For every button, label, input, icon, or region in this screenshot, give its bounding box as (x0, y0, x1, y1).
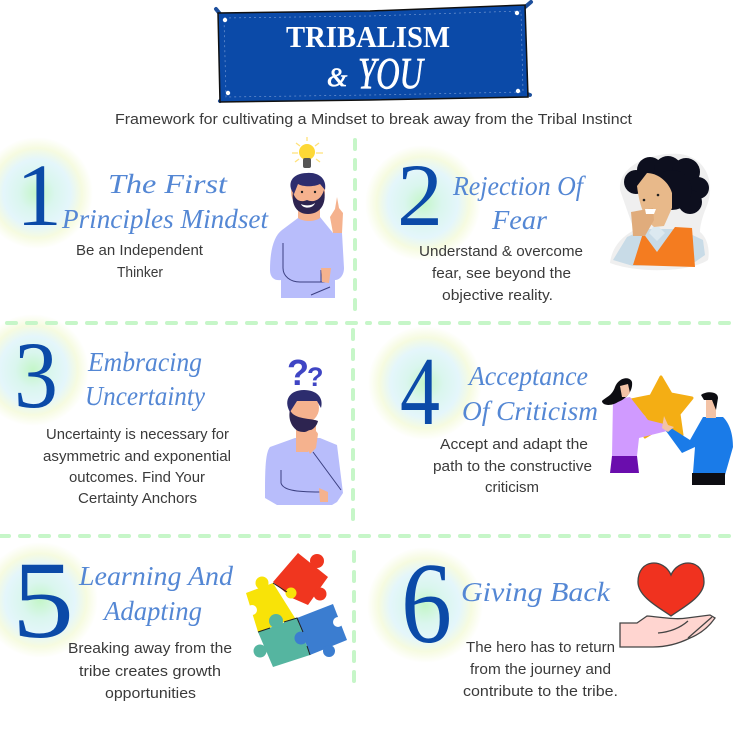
icon: light bulb (292, 137, 323, 168)
number 3: 3 (14, 322, 58, 428)
panel: 3 embracing uncertainty (0, 314, 343, 507)
panel: 2 rejection of fear (365, 145, 710, 304)
number 6: 6 (401, 540, 452, 667)
heading: Giving Back (461, 577, 611, 607)
body text: opportunities (105, 685, 196, 702)
heading: Rejection Of (452, 171, 586, 201)
number 1: 1 (16, 147, 62, 245)
heading: Adapting (102, 596, 202, 626)
number glow (0, 542, 98, 658)
banner eyelets (223, 11, 520, 95)
heading: Uncertainty (85, 381, 205, 411)
number glow (368, 326, 482, 440)
body text: objective reality. (442, 287, 553, 304)
body text: asymmetric and exponential (43, 448, 231, 465)
number 5: 5 (12, 539, 74, 661)
banner cloth (218, 5, 528, 102)
number 2: 2 (397, 147, 443, 245)
subtitle: Framework for cultivating a Mindset to break away from the Tribal Instinct (115, 111, 633, 128)
heading: Of Criticism (462, 396, 598, 426)
heading: Learning And (78, 561, 234, 591)
banner subheading: YOU (358, 49, 425, 98)
body text: criticism (485, 479, 539, 496)
icon: puzzle pieces (246, 553, 347, 667)
body text: from the journey and (470, 661, 611, 678)
body text: path to the constructive (433, 458, 592, 475)
banner stitching (224, 11, 523, 97)
banner heading: TRIBALISM (286, 19, 450, 54)
panel: 4 acceptance of criticism (368, 326, 733, 496)
panel: 5 learning and adapting (0, 539, 347, 702)
icon: heart in hand (620, 563, 715, 647)
title banner (216, 2, 531, 102)
number glow (365, 145, 481, 261)
banner pegs (216, 2, 531, 101)
heading: Embracing (87, 347, 202, 377)
heading: Acceptance (467, 361, 588, 391)
panel: 1 first principles (0, 137, 344, 298)
icon: two people holding star (602, 377, 733, 485)
body text: Breaking away from the (68, 640, 232, 657)
icon: pondering man (265, 390, 343, 505)
panel: 6 giving back (367, 540, 715, 700)
body text: The hero has to return (466, 639, 615, 656)
body text: Understand & overcome (419, 243, 583, 260)
body text: Certainty Anchors (78, 490, 197, 507)
banner subheading: & (327, 63, 347, 92)
icon: question marks: ? (307, 362, 324, 392)
icon: question marks: ? (287, 352, 309, 393)
number glow (367, 547, 483, 663)
heading: Fear (491, 205, 548, 235)
body text: Uncertainty is necessary for (46, 426, 229, 443)
number glow (0, 314, 89, 426)
body text: fear, see beyond the (432, 265, 571, 282)
number glow (0, 137, 93, 249)
body text: Thinker (117, 264, 163, 281)
heading: The First (108, 169, 229, 199)
icon: worried woman (610, 154, 710, 270)
body text: Accept and adapt the (440, 436, 588, 453)
body text: outcomes. Find Your (69, 469, 205, 486)
number 4: 4 (400, 338, 440, 445)
body text: tribe creates growth (79, 663, 221, 680)
heading: Principles Mindset (61, 204, 270, 234)
body text: contribute to the tribe. (463, 683, 618, 700)
body text: Be an Independent (76, 242, 204, 259)
icon: thinking man pointing (270, 173, 344, 298)
